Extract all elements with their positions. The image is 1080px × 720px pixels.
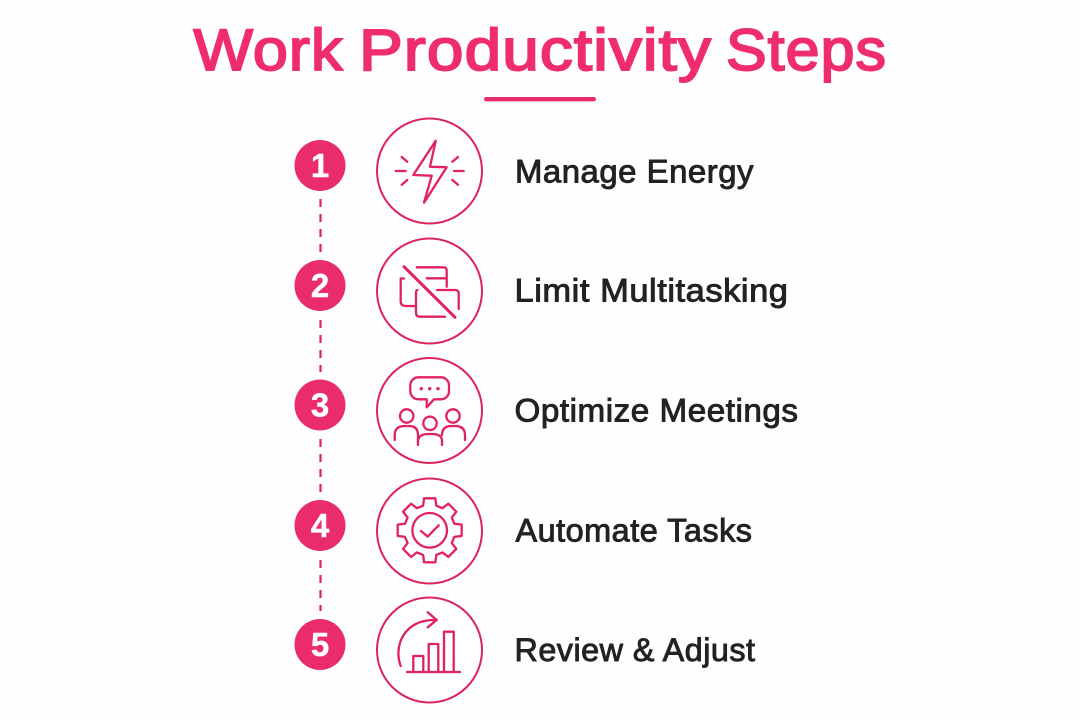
number badge 4 (294, 500, 346, 551)
step 3: optimize meetings (294, 358, 798, 463)
number badge 3 (294, 380, 346, 430)
number badge 5 (294, 619, 346, 670)
dashed connector: step 2 to 3 (319, 320, 322, 372)
dashed connector: step 4 to 5 (319, 560, 322, 611)
number badge 1: 1 (311, 147, 329, 184)
title (194, 18, 887, 83)
icon: lightning bolt (377, 118, 482, 224)
icon: crossed-out windows (377, 238, 482, 344)
icon: gear with check mark (377, 478, 482, 584)
step 1: manage energy (294, 118, 754, 224)
title: Steps (726, 18, 887, 83)
number badge 5: 5 (311, 626, 329, 663)
number badge 2: 2 (311, 267, 329, 304)
label: review and adjust: Review & Adjust (514, 632, 756, 668)
label: optimize meetings: Optimize Meetings (514, 393, 798, 429)
title underline (484, 97, 596, 101)
title: Productivity (359, 18, 712, 83)
label: automate tasks: Automate Tasks (516, 513, 752, 549)
icon: team meeting with speech bubble (377, 358, 482, 463)
step 2: limit multitasking (294, 238, 788, 344)
number badge 4: 4 (311, 507, 330, 544)
label: limit multitasking: Limit Multitasking (514, 273, 788, 309)
dashed connector: step 3 to 4 (319, 439, 322, 492)
icon: rising bar chart with arrow (377, 598, 482, 702)
step 5: review and adjust (294, 598, 756, 702)
title: Work (194, 18, 344, 83)
step 4: automate tasks (294, 478, 752, 584)
label: manage energy: Manage Energy (515, 154, 754, 190)
number badge 1 (294, 140, 346, 191)
dashed connector: step 1 to 2 (319, 199, 322, 252)
number badge 2 (294, 260, 346, 311)
number badge 3: 3 (311, 386, 329, 424)
